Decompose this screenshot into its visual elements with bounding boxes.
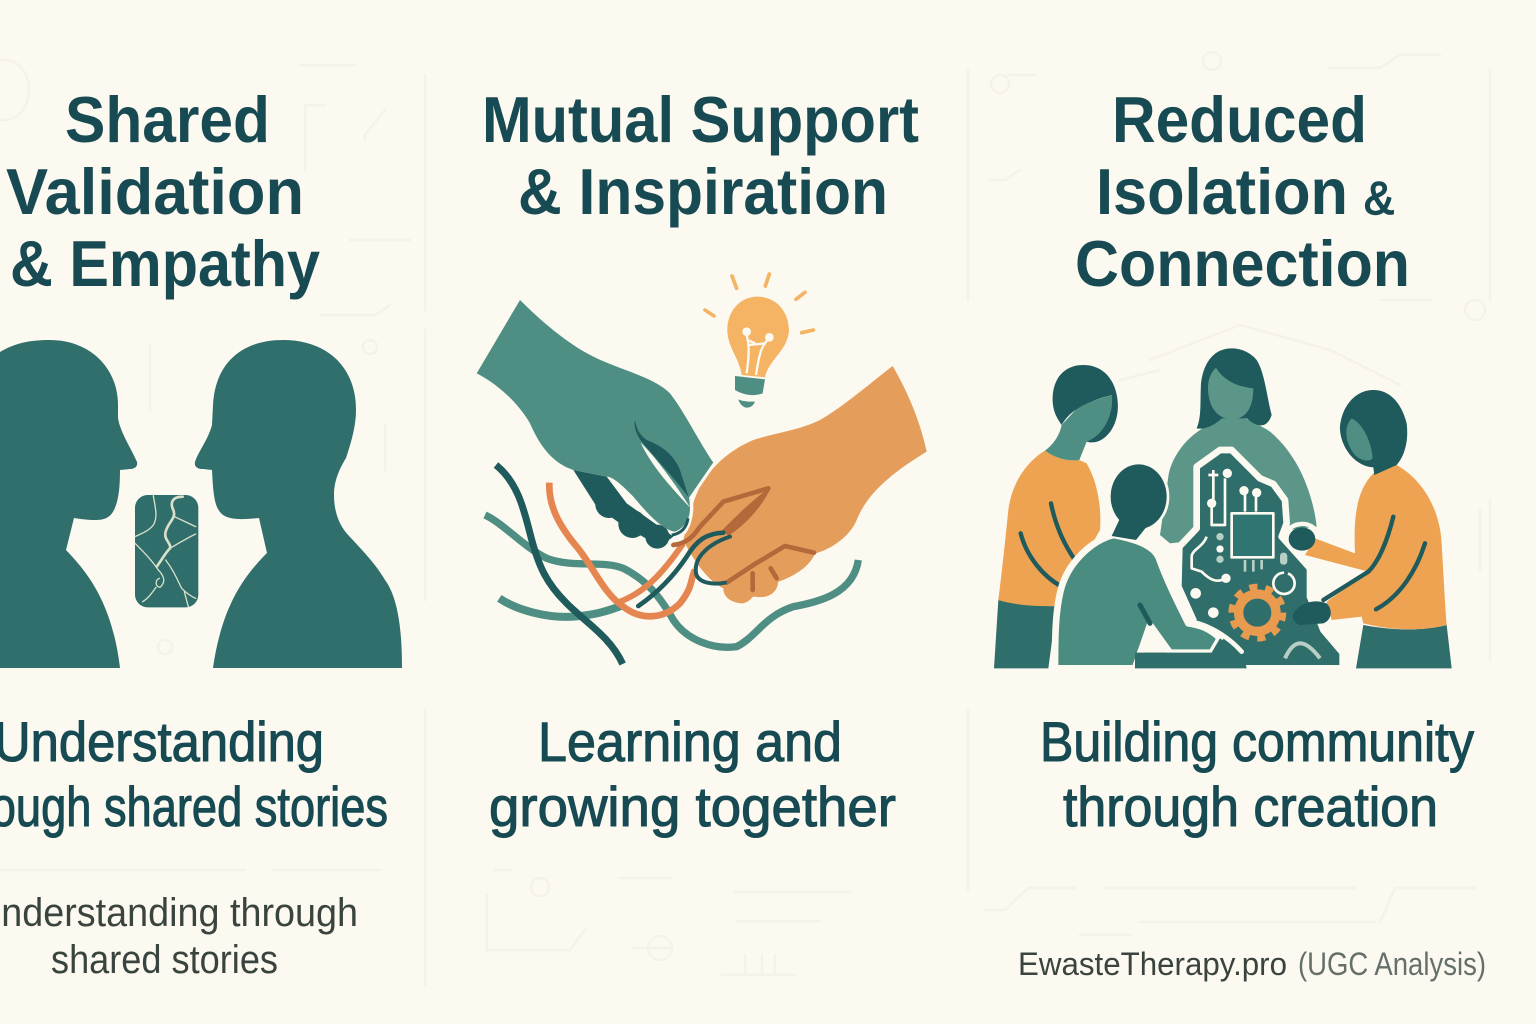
panel: shared validation and empathy (0, 83, 402, 982)
heading: shared validation and empathy: & Empathy (10, 227, 320, 300)
heading: reduced isolation and connection: Reduced (1112, 83, 1367, 156)
heading: reduced isolation and connection: Isolation (1096, 155, 1348, 228)
subheading: learning and growing together: growing together (489, 775, 896, 838)
caption: understanding through shared stories: shared stories (51, 938, 278, 982)
heading: reduced isolation and connection: & (1364, 172, 1394, 224)
loose wires (485, 465, 858, 664)
heading: mutual support and inspiration: Mutual Support (482, 83, 919, 156)
subheading: understanding through shared stories: Understanding (0, 710, 324, 773)
person standing at right (1283, 390, 1452, 668)
source credit (1018, 946, 1486, 982)
person standing at back (1160, 348, 1317, 543)
subheading: learning and growing together: Learning and (538, 710, 842, 773)
left head silhouette (0, 340, 137, 668)
icon: four people around a circuit board (994, 348, 1452, 668)
person seated in front (1055, 464, 1247, 668)
subheading: building community through creation: Building community (1040, 710, 1474, 773)
subheading: building community through creation (1040, 710, 1474, 838)
subheading: understanding through shared stories (0, 710, 388, 838)
panel: reduced isolation and connection (994, 83, 1474, 838)
orange hand creases (673, 488, 814, 590)
orange gear (1232, 587, 1283, 638)
icon: two facing silhouettes with a cracked card (0, 340, 402, 668)
orange hand (683, 366, 927, 603)
subheading: building community through creation: through creation (1063, 775, 1438, 838)
teal hand shadowed fingers (573, 470, 673, 549)
heading: shared validation and empathy: Validation (6, 155, 304, 228)
panel: mutual support and inspiration (477, 83, 927, 838)
cracked card (135, 495, 198, 607)
icon: two hands, wires and a light bulb (477, 274, 927, 664)
right head silhouette (195, 340, 402, 668)
heading: shared validation and empathy (6, 83, 320, 300)
light rays (705, 274, 813, 333)
caption: understanding through shared stories (0, 891, 358, 982)
heading: reduced isolation and connection (1075, 83, 1410, 300)
teal hand outline against orange (684, 464, 714, 533)
heading: mutual support and inspiration: & Inspiration (518, 155, 888, 228)
source credit: EwasteTherapy.pro (1018, 946, 1287, 982)
teal hand palm shadow (635, 420, 689, 497)
heading: mutual support and inspiration (482, 83, 919, 228)
person standing at left (994, 365, 1118, 668)
heading: reduced isolation and connection: Connection (1075, 227, 1410, 300)
dark wires held by the hands (638, 533, 730, 606)
subheading: learning and growing together (489, 710, 896, 838)
circuit board (1135, 450, 1343, 668)
source credit: (UGC Analysis) (1298, 946, 1486, 982)
light bulb (727, 297, 789, 408)
teal hand finger slit (641, 443, 691, 508)
teal hand (477, 300, 713, 532)
heading: shared validation and empathy: Shared (65, 83, 270, 156)
dark fingertip edge (672, 518, 688, 535)
